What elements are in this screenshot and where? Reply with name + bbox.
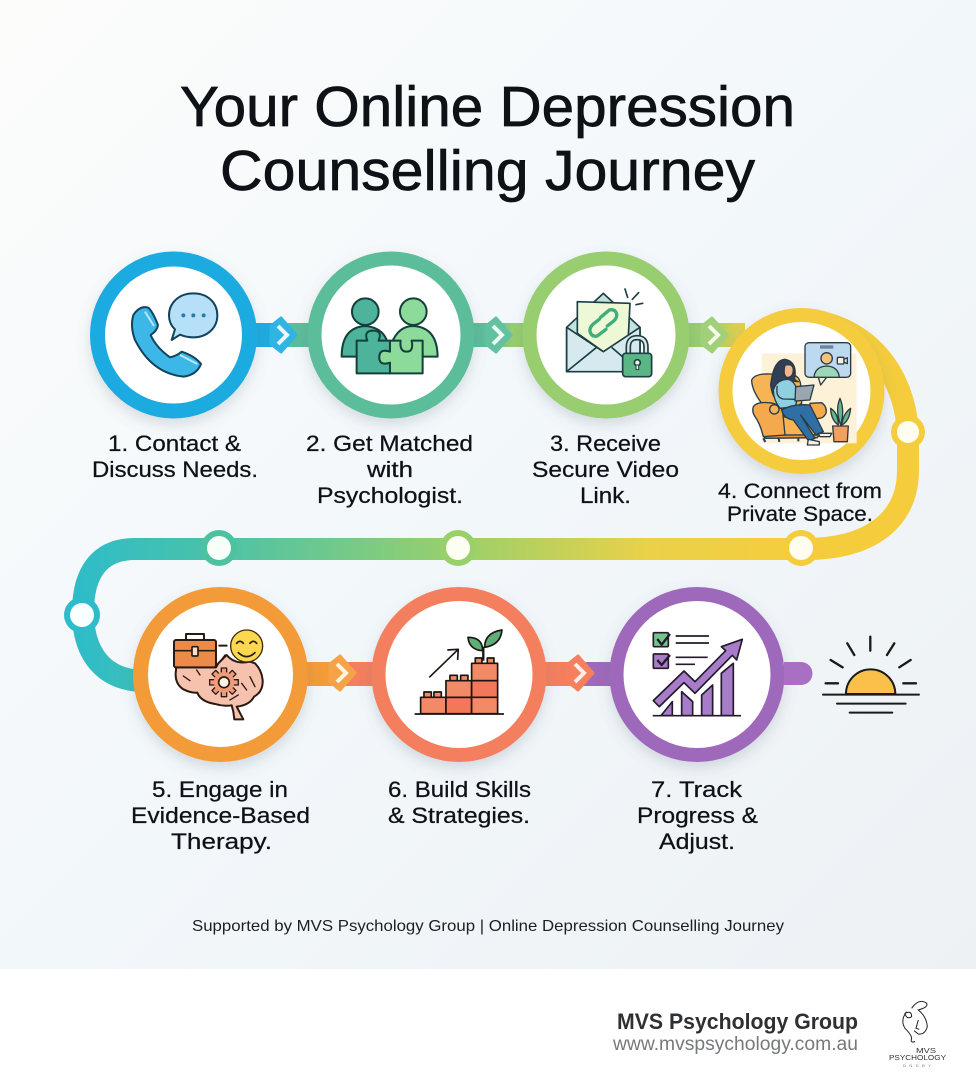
arrow: step 6 to 7 [568, 656, 593, 690]
step 5 ring [140, 594, 300, 754]
footer website: www.mvspsychology.com.au [612, 1034, 858, 1055]
step 4 label [718, 480, 882, 526]
track node: centre [440, 530, 476, 566]
logo: MVS [916, 1048, 936, 1055]
footer band [0, 969, 976, 1088]
step 4 label: 4. Connect from [718, 480, 882, 503]
step 7 label: 7. Track [651, 777, 743, 802]
track node: far left [64, 597, 100, 633]
supporting caption: Supported by MVS Psychology Group | Online Depression Counselling Journey [192, 918, 784, 935]
arrow: step 5 to 6 [330, 656, 355, 690]
arrow: step 2 to 3 [486, 318, 511, 352]
step 6 label: 6. Build Skills [388, 777, 531, 802]
icon: two people with puzzle pieces [342, 298, 438, 373]
logo [889, 1001, 946, 1068]
track node: lower right [783, 530, 819, 566]
end stub of track [784, 662, 812, 685]
title: Counselling Journey [220, 139, 756, 203]
step 4 label: Private Space. [727, 503, 873, 526]
step 6 label [388, 777, 531, 828]
step 5 label: 5. Engage in [152, 777, 288, 802]
step 3 label: 3. Receive [550, 431, 661, 456]
step 5 label: Therapy. [171, 829, 272, 854]
step 1 label: 1. Contact & [108, 431, 241, 456]
track node: right [891, 415, 925, 449]
step 5 label [131, 777, 310, 854]
step 5 label: Evidence-Based [131, 803, 310, 828]
step 3 label [532, 431, 679, 508]
step 6 label: & Strategies. [388, 803, 530, 828]
icon: envelope with secure link and padlock [567, 289, 652, 377]
step 2 label: Psychologist. [317, 483, 463, 508]
step 3 label: Secure Video [532, 457, 679, 482]
footer brand name: MVS Psychology Group [617, 1009, 858, 1034]
track node: left [201, 530, 237, 566]
winding journey track [83, 320, 908, 681]
icon: brain with toolbox, gear and smile [174, 630, 263, 719]
logo: DNDBY [903, 1063, 931, 1068]
step 7 ring [616, 594, 778, 755]
arrow: step 3 to 4 [702, 318, 727, 352]
step 7 label: Adjust. [659, 829, 735, 854]
step 3 ring [530, 258, 682, 412]
step 1 ring [98, 259, 250, 411]
icon: phone and speech bubble [132, 293, 217, 377]
title [180, 75, 795, 203]
step 2 ring [314, 258, 468, 412]
icon: checklist and rising chart [653, 633, 742, 716]
step 7 label: Progress & [637, 803, 758, 828]
connector lines between steps [250, 323, 745, 686]
step 2 label: 2. Get Matched [306, 431, 473, 456]
icon: person on armchair with video call [752, 343, 857, 445]
step 1 label: Discuss Needs. [92, 457, 258, 482]
step 2 label: with [366, 457, 413, 482]
icon: rising sun over horizon [823, 637, 919, 713]
title: Your Online Depression [180, 75, 795, 139]
step 6 ring [378, 594, 540, 755]
step 2 label [306, 431, 473, 508]
step 3 label: Link. [580, 483, 631, 508]
step 1 label [92, 431, 258, 482]
step 4 ring [726, 315, 878, 467]
step 7 label [637, 777, 758, 854]
arrow: step 1 to 2 [271, 318, 296, 352]
logo: PSYCHOLOGY [889, 1053, 946, 1062]
icon: stacked blocks with sprout and arrow [415, 630, 504, 714]
